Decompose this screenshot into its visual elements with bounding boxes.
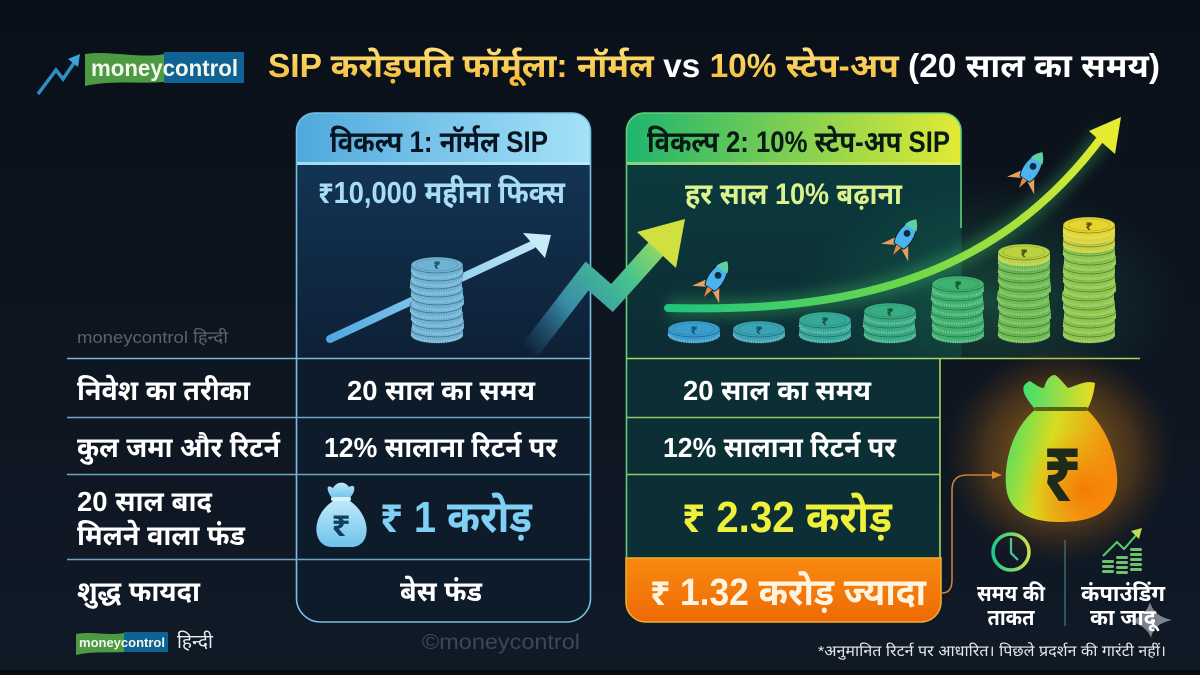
row: investment: 20 साल का समय <box>683 375 872 406</box>
row: investment: निवेश का तरीका <box>77 373 251 406</box>
icon: sparkle watermark <box>1130 602 1172 638</box>
icon: small money bag: ₹ <box>332 506 350 543</box>
row: fund after 20 years: 20 साल बाद <box>77 486 213 517</box>
table body <box>626 358 940 560</box>
subheading: हर साल 10% बढ़ाना <box>685 178 903 211</box>
callout: extra gain <box>626 558 941 622</box>
row lines <box>67 358 590 360</box>
coin stack <box>410 257 464 343</box>
benefit: power of time <box>977 534 1045 630</box>
growth curve arrow <box>668 117 1121 308</box>
heading: विकल्प 1: नॉर्मल SIP <box>330 125 548 159</box>
row: fund after 20 years: ₹ 2.32 करोड़ <box>682 492 893 542</box>
coin stacks: ₹ <box>887 305 894 319</box>
panel: normal SIP <box>296 113 590 622</box>
panel border <box>296 113 590 622</box>
row: investment <box>77 373 872 406</box>
coin stacks: ₹ <box>822 314 829 328</box>
icon: trend arrow <box>38 54 80 94</box>
row: deposit and return: कुल जमा और रिटर्न <box>77 431 281 465</box>
icon: clock <box>993 534 1029 570</box>
arrow <box>330 233 551 339</box>
benefit: compounding magic: कंपाउंडिंग <box>1081 581 1165 606</box>
row: fund after 20 years: ₹ 1 करोड़ <box>380 492 533 542</box>
logo: moneycontrol header: moneycontrol <box>91 55 238 81</box>
benefit: power of time: समय की <box>977 581 1045 606</box>
panel header <box>296 113 590 165</box>
watermark: moneycontrol hindi: moneycontrol हिन्दी <box>77 327 229 347</box>
coin stack: ₹ <box>434 258 441 272</box>
logo: moneycontrol hindi footer: moneycontrol <box>79 635 165 650</box>
panel header <box>626 113 961 165</box>
logo: moneycontrol hindi footer: हिन्दी <box>177 631 214 653</box>
subheading: ₹10,000 महीना फिक्स <box>318 175 566 210</box>
row: net benefit <box>77 574 483 609</box>
arrow: zigzag between panels <box>530 219 685 350</box>
benefit: compounding magic: का जादू <box>1090 605 1161 632</box>
row: deposit and return: 12% सालाना रिटर्न पर <box>663 431 897 463</box>
heading: विकल्प 2: 10% स्टेप-अप SIP <box>647 124 950 159</box>
row: deposit and return <box>77 431 897 465</box>
coin stacks: ₹ <box>756 323 763 337</box>
logo: moneycontrol header <box>38 52 244 94</box>
panel body <box>296 165 590 358</box>
coin stacks: ₹ <box>691 323 698 337</box>
coin stacks: ₹ <box>1086 219 1093 233</box>
row: net benefit: शुद्ध फायदा <box>77 576 201 609</box>
icon: small money bag <box>316 483 367 547</box>
row: fund after 20 years: मिलने वाला फंड <box>77 518 246 551</box>
borders <box>626 113 961 600</box>
benefit: compounding magic <box>1081 528 1165 632</box>
row: net benefit: बेस फंड <box>400 574 483 607</box>
table: comparison rows <box>67 358 940 609</box>
footnote: *अनुमानित रिटर्न पर आधारित। पिछले प्रदर्शन की गारंटी नहीं। <box>818 642 1166 661</box>
row: deposit and return: 12% सालाना रिटर्न पर <box>324 431 558 463</box>
icon: compounding chart <box>1102 528 1142 574</box>
benefit: power of time: ताकत <box>988 605 1035 630</box>
row: investment: 20 साल का समय <box>347 375 536 406</box>
watermark: copyright moneycontrol: ©moneycontrol <box>422 631 580 654</box>
icon: big money bag: ₹ <box>1043 425 1081 519</box>
icon: big money bag <box>945 345 1175 565</box>
logo: moneycontrol hindi footer <box>76 631 214 655</box>
title: SIP करोड़पति फॉर्मूला: नॉर्मल vs 10% स्टेप-अप (20 साल का समय) <box>268 46 1160 87</box>
coin stacks: ₹ <box>1021 246 1028 260</box>
arrow: callout to money bag <box>942 475 994 593</box>
coin stacks <box>668 217 1116 343</box>
callout: extra gain: ₹ 1.32 करोड़ ज्यादा <box>650 570 927 614</box>
coin stacks: ₹ <box>955 278 962 292</box>
row: fund after 20 years <box>77 483 893 551</box>
icon: rockets <box>691 143 1056 306</box>
panel: step-up SIP <box>626 112 1147 558</box>
chart area background <box>626 165 962 358</box>
divider <box>1064 540 1066 626</box>
